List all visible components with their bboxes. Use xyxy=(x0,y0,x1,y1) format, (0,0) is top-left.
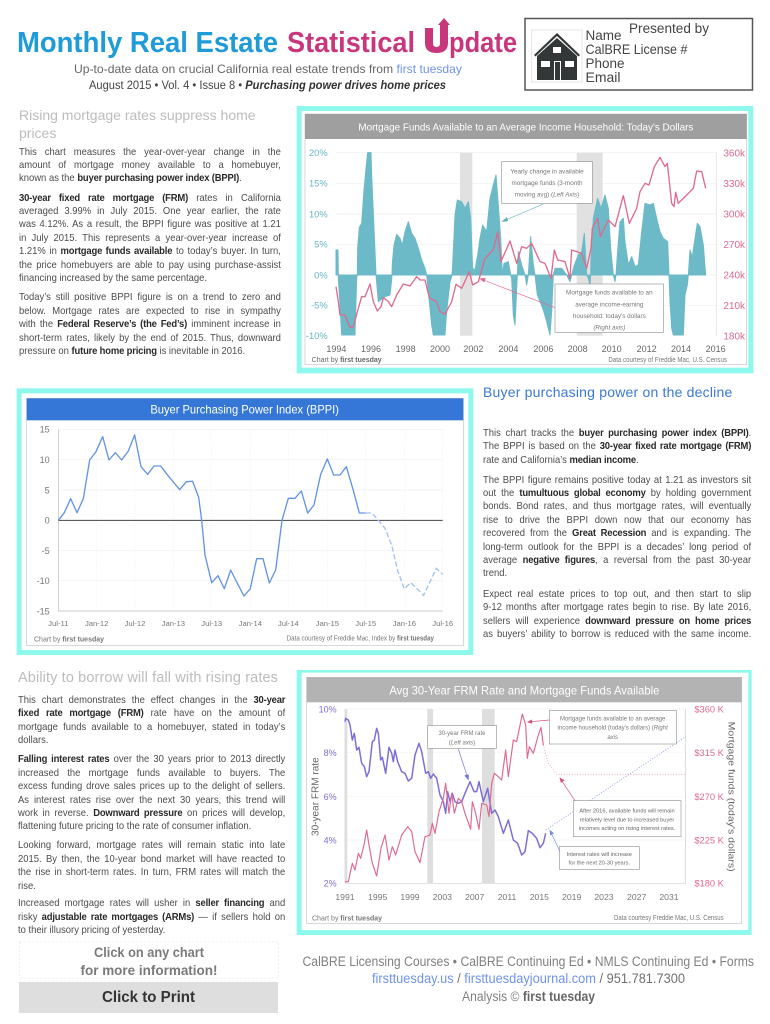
masthead title: Statistical xyxy=(287,27,415,59)
presenter box: CalBRE License # xyxy=(586,41,688,57)
button: click to print: Click to Print xyxy=(102,989,196,1006)
text block: looking forward: 2015. By then, the 10-year bond market will have reacted to xyxy=(18,853,285,865)
text block: rising rates intro: amount of mortgage money available to a homebuyer, xyxy=(19,159,281,171)
chart credits: Chart by first tuesday xyxy=(34,637,104,644)
y axis labels: 15 xyxy=(40,425,50,435)
text block: BPPI description: The BPPI is based on the 30-year fixed rate mortgage (FRM) xyxy=(483,440,751,452)
text block: BPPI outlook: rise to drive the BPPI down now that our economy has xyxy=(483,514,751,526)
callout: mortgage funds: income household (today's dollars) (Right xyxy=(558,726,668,732)
text block: falling interest rates: work in reverse. Downward pressure on prices will develop, xyxy=(18,807,285,819)
x axis labels: 2003 xyxy=(433,892,452,902)
x axis labels: Jan-15 xyxy=(316,619,339,628)
x axis labels: 2016 xyxy=(706,344,726,354)
y axis labels: 10 xyxy=(40,455,50,465)
text block: 30-year FRM: was 4.12%. As a result, the BPPI figure was positive at 1.21 xyxy=(19,218,281,230)
callout: mortgage funds: average income-earning xyxy=(575,301,644,308)
right axis labels: 360k xyxy=(723,148,746,159)
text block: price expectations: Expect real estate prices to top out, and then start to slip xyxy=(483,588,751,600)
callout: FRM rate xyxy=(428,726,497,748)
heading: rising mortgage rates xyxy=(19,107,256,141)
x axis labels: Jan-14 xyxy=(239,619,263,628)
line: mortgage funds forecast xyxy=(543,745,686,774)
chart credits xyxy=(34,636,434,644)
text block: rising rates intro: This chart measures the year-over-year change in the xyxy=(19,146,281,158)
callout: after 2016: After 2016, available funds will remain xyxy=(579,809,675,815)
x axis labels: 2031 xyxy=(659,892,679,902)
text block: positive BPPI: below. Mortgage rates are expected to rise in sympathy xyxy=(19,305,281,317)
callout: yearly change xyxy=(502,162,592,203)
left axis labels xyxy=(306,148,328,341)
x axis labels: 2004 xyxy=(498,344,518,354)
chart header: Avg 30-Year FRM Rate and Mortgage Funds Available xyxy=(389,684,659,697)
chart credits: Data courtesy Freddie Mac, U.S. Census xyxy=(614,915,724,922)
left axis labels: -10% xyxy=(306,331,328,341)
text block: 30-year FRM: financing increased by the same percentage. xyxy=(19,272,207,284)
left axis title: 30-year FRM rate xyxy=(311,757,322,836)
right axis title: Mortgage funds (today's dollars) xyxy=(726,722,736,872)
left axis labels: -5% xyxy=(311,301,328,311)
text block: 30-year FRM: 30-year fixed rate mortgage (FRM) rates in California xyxy=(19,192,281,204)
callout: mortgage funds: (Right axis) xyxy=(593,325,625,332)
x axis labels xyxy=(48,619,453,628)
x axis labels: 2010 xyxy=(602,344,622,354)
left axis labels: 4% xyxy=(324,835,337,845)
line: mortgage funds in dollars xyxy=(336,157,706,328)
masthead title xyxy=(17,18,517,59)
x axis labels: Jul-14 xyxy=(278,619,299,628)
right axis labels: $225 K xyxy=(694,835,725,845)
text block: price expectations: sellers will experience downward pressure on home prices xyxy=(483,615,751,627)
x axis labels: 1995 xyxy=(368,892,387,902)
text block: price expectations xyxy=(483,588,751,640)
callout: after 2016 xyxy=(573,801,681,837)
text block: BPPI outlook: recovered from the Great Recession and is expanding. The xyxy=(483,527,751,539)
text block: 30-year FRM: in July 2015. This represents a year-over-year increase of xyxy=(19,232,281,244)
left axis labels: 2% xyxy=(324,879,337,889)
callout: click on any chart: for more information! xyxy=(80,962,218,978)
text block: positive BPPI: with the Federal Reserve’s (the Fed’s) imminent increase in xyxy=(19,318,281,330)
x axis labels: 1991 xyxy=(335,892,355,902)
line: FRM rate forecast xyxy=(546,737,686,830)
masthead title: Monthly Real Estate xyxy=(17,27,278,59)
footer links: Analysis © first tuesday xyxy=(462,989,595,1004)
chart credits: Data courtesy of Freddie Mac, U.S. Census xyxy=(608,357,727,364)
bars: yearly change in mortgage funds xyxy=(336,153,706,335)
text block: chart demonstration: mortgage funds available to a homebuyer, stated in today’s xyxy=(18,721,285,733)
text block: rising rates intro xyxy=(19,146,281,184)
chart header xyxy=(305,114,747,139)
chart header xyxy=(27,398,463,420)
x axis labels: 2015 xyxy=(530,892,549,902)
y axis labels: -10 xyxy=(37,576,50,586)
right axis labels xyxy=(694,704,725,889)
chart credits: Data courtesy of Freddie Mac, Index by first tuesday xyxy=(287,636,434,643)
chart credits: Chart by first tuesday xyxy=(312,357,382,364)
x axis labels: 2023 xyxy=(594,892,614,902)
presenter box: Presented by xyxy=(629,20,709,36)
subtitle: Up-to-date data on crucial California real estate trends from first tuesday xyxy=(74,62,462,76)
text block: BPPI outlook: trend. xyxy=(483,567,507,579)
x axis labels: 2019 xyxy=(562,892,581,902)
text block: 30-year FRM: 1.21% in mortgage funds available to today’s buyer. In turn, xyxy=(19,245,281,257)
text block: BPPI outlook xyxy=(483,474,752,579)
line: BPPI forecast xyxy=(366,513,443,595)
callout: after 2016: incomes acting on rising interest rates. xyxy=(579,826,676,832)
y axis labels: 5 xyxy=(45,485,50,495)
x axis labels: Jul-11 xyxy=(48,619,68,628)
button: click to print xyxy=(19,982,278,1013)
text block: positive BPPI: Today’s still positive BPPI figure is on a trend to zero and xyxy=(19,291,281,303)
text block: looking forward xyxy=(18,839,285,892)
text block: falling interest rates: Falling interest rates over the 30 years prior to 2013 directly xyxy=(18,753,285,765)
heading: buyer purchasing power: Buyer purchasing power on the decline xyxy=(483,384,732,400)
heading: ability to borrow: Ability to borrow will fall with rising rates xyxy=(18,670,278,686)
right axis labels: $360 K xyxy=(694,704,725,714)
left axis labels: 10% xyxy=(319,704,337,714)
x axis labels: 2014 xyxy=(671,344,691,354)
x axis labels: 2011 xyxy=(498,892,516,902)
text block: falling interest rates: As interest rates rise over the next 30 years, this trend will xyxy=(18,794,285,806)
x axis labels: 1994 xyxy=(326,344,346,354)
chart header xyxy=(307,677,742,702)
text block: 30-year FRM: the price homebuyers are able to pay using purchase-assist xyxy=(19,259,281,271)
text block: positive BPPI xyxy=(19,291,281,357)
chart header: Mortgage Funds Available to an Average Income Household: Today's Dollars xyxy=(358,122,693,133)
chart header: Buyer Purchasing Power Index (BPPI) xyxy=(150,404,339,417)
text block: positive BPPI: short-term rates, likely by the end of 2015. Thus, downward xyxy=(19,332,281,344)
text block: falling interest rates: increased the mortgage funds available to buyers. The xyxy=(18,767,285,779)
right axis labels: 300k xyxy=(723,210,746,221)
left axis labels: 6% xyxy=(324,792,337,802)
y axis labels: -5 xyxy=(42,546,50,556)
right axis labels: 240k xyxy=(723,271,746,282)
x axis labels xyxy=(335,892,679,902)
arrow: FRM rate xyxy=(458,749,468,780)
x axis labels: Jul-13 xyxy=(201,619,222,628)
text block: falling interest rates xyxy=(18,753,286,832)
x axis labels: Jan-13 xyxy=(162,619,185,628)
left axis labels: 15% xyxy=(309,179,328,189)
subtitle xyxy=(74,62,462,92)
heading: rising mortgage rates: Rising mortgage rates suppress home xyxy=(19,107,256,123)
line: FRM rate xyxy=(345,718,546,855)
right axis labels: 210k xyxy=(723,301,746,312)
callout: mortgage funds xyxy=(555,284,663,332)
right axis labels: 330k xyxy=(723,179,746,190)
right axis labels xyxy=(717,148,746,342)
text block: BPPI outlook: bonds. Bond rates, and thus mortgage rates, will eventually xyxy=(483,500,751,512)
text block: BPPI description: This chart tracks the buyer purchasing power index (BPPI). xyxy=(483,427,751,439)
y axis labels xyxy=(37,425,50,616)
callout: mortgage funds: household: today's dollars xyxy=(573,313,646,320)
callout: FRM rate: (Left axis) xyxy=(449,740,475,746)
presenter box: Email xyxy=(586,69,620,85)
arrow: mortgage funds xyxy=(528,720,549,723)
left axis labels xyxy=(319,704,337,889)
x axis labels: Jul-12 xyxy=(125,619,145,628)
left axis labels: 0% xyxy=(314,270,328,280)
text block: chart demonstration xyxy=(18,694,286,746)
left axis labels: 5% xyxy=(314,240,328,250)
footer links: firsttuesday.us / firsttuesdayjournal.com / 951.781.7300 xyxy=(372,971,685,986)
text block: looking forward: the rise in short-term rates. In turn, FRM rates will match the xyxy=(18,866,285,878)
x axis labels: 2008 xyxy=(568,344,588,354)
x axis labels xyxy=(326,344,726,354)
x axis labels: 2012 xyxy=(637,344,657,354)
text block: BPPI outlook: average negative figures, a reversal from the past 30-year xyxy=(483,554,751,566)
left axis labels: 10% xyxy=(309,209,328,219)
text block: seller financing: Increased mortgage rates will usher in seller financing and xyxy=(18,897,285,909)
text block: BPPI description: rate and California’s median income. xyxy=(483,454,639,466)
line: mortgage funds xyxy=(345,714,543,882)
text block: BPPI outlook: long-term outlook for the BPPI is a decades’ long period of xyxy=(483,541,751,553)
recession bands xyxy=(345,709,495,883)
callout: yearly change: mortgage funds (3-month xyxy=(511,180,583,187)
text block: seller financing: to their illusory pricing of yesterday. xyxy=(18,924,165,936)
arrow: to line xyxy=(480,278,555,308)
right axis labels: $270 K xyxy=(694,792,725,802)
x axis labels: 2000 xyxy=(430,344,450,354)
chart panel: FRM rate and mortgage funds xyxy=(296,670,752,935)
right axis labels: $180 K xyxy=(694,879,725,889)
text block: chart demonstration: fixed rate mortgage (FRM) rate have on the amount of xyxy=(18,707,285,719)
icon: house xyxy=(532,30,582,82)
callout: interest rates: for the next 20-30 years. xyxy=(569,861,630,867)
x axis labels: 2002 xyxy=(463,344,483,354)
arrow: to bars xyxy=(502,204,543,221)
x axis labels: 2007 xyxy=(465,892,484,902)
masthead title: pdate xyxy=(449,27,517,59)
x axis labels: 1998 xyxy=(396,344,416,354)
text block: seller financing xyxy=(18,897,285,936)
text block: falling interest rates: excess funding drove sales prices up to the delight of sellers. xyxy=(18,780,285,792)
x axis labels: 1999 xyxy=(400,892,420,902)
text block: chart demonstration: dollars. xyxy=(18,734,48,746)
callout: after 2016: relatively level due to increased buyer xyxy=(580,817,674,823)
callout: mortgage funds: axis xyxy=(607,735,618,741)
text block: price expectations: as buyers’ ability to borrow is reduced with the same income. xyxy=(483,628,751,640)
left axis labels: 8% xyxy=(324,748,337,758)
x axis labels: 1996 xyxy=(361,344,381,354)
text block: 30-year FRM: averaged 3.99% in July 2015. One year earlier, the rate xyxy=(19,205,281,217)
left axis labels: 20% xyxy=(309,148,328,158)
callout: click on any chart: Click on any chart xyxy=(94,944,204,960)
chart credits: Chart by first tuesday xyxy=(312,916,382,923)
text block: looking forward: Looking forward, mortgage rates will remain static into late xyxy=(18,839,285,851)
x axis labels: 2006 xyxy=(533,344,553,354)
text block: BPPI outlook: out the tumultuous global economy by holding government xyxy=(483,487,751,499)
callout: mortgage funds xyxy=(549,710,676,744)
x axis labels: 2027 xyxy=(627,892,646,902)
chart panel: mortgage funds available xyxy=(296,106,754,374)
x axis labels: Jan-12 xyxy=(85,619,108,628)
right axis labels: 180k xyxy=(723,331,746,342)
chart panel: buyer purchasing power index xyxy=(16,388,474,655)
callout: yearly change: moving avg) (Left Axis) xyxy=(515,192,579,199)
y axis labels: -15 xyxy=(37,606,50,616)
heading: rising mortgage rates: prices xyxy=(19,125,56,141)
chart credits xyxy=(312,915,724,923)
callout: mortgage funds: Mortgage funds available to an xyxy=(566,290,653,297)
text block: 30-year FRM xyxy=(19,192,281,284)
footer links xyxy=(302,954,754,1004)
x axis labels: Jul-16 xyxy=(432,619,453,628)
callout: interest rates xyxy=(559,847,639,869)
right axis labels: 270k xyxy=(723,240,746,251)
callout: mortgage funds: Mortgage funds available to an average xyxy=(560,717,666,723)
text block: rising rates intro: known as the buyer purchasing power index (BPPI). xyxy=(19,172,242,184)
text block: BPPI outlook: The BPPI figure remains positive today at 1.21 as investors sit xyxy=(483,474,751,486)
subtitle: August 2015 • Vol. 4 • Issue 8 • Purchasing power drives home prices xyxy=(89,80,446,92)
text block: chart demonstration: This chart demonstrates the effect changes in the 30-year xyxy=(18,694,285,706)
arrow: after 2016 xyxy=(560,778,575,801)
x axis labels: Jan-16 xyxy=(393,619,416,628)
arrow: interest rates xyxy=(550,830,560,852)
text block: falling interest rates: flattening future pricing to the rate of consumer inflation. xyxy=(18,820,251,832)
recession bands xyxy=(460,153,603,336)
presenter box: Name xyxy=(586,27,622,43)
x axis labels: Jul-15 xyxy=(355,619,376,628)
chart credits xyxy=(312,357,727,364)
callout: FRM rate: 30-year FRM rate xyxy=(438,731,486,737)
y axis labels: 0 xyxy=(45,516,50,526)
right axis labels: $315 K xyxy=(694,748,725,758)
text block: looking forward: rise. xyxy=(18,880,36,892)
line: BPPI actual xyxy=(58,435,366,596)
callout: click on any chart xyxy=(19,942,279,978)
callout: yearly change: Yearly change in available xyxy=(510,168,584,175)
presenter box xyxy=(524,18,754,91)
presenter box: Phone xyxy=(586,55,625,71)
text block: BPPI description xyxy=(483,427,751,466)
text block: seller financing: risky adjustable rate mortgages (ARMs) — if sellers hold on xyxy=(18,911,285,923)
text block: price expectations: 9-12 months after mortgage rates begin to rise. By late 2016, xyxy=(483,601,751,613)
text block: positive BPPI: pressure on future home pricing is inevitable in 2016. xyxy=(19,345,245,357)
callout: interest rates: Interest rates will increase xyxy=(567,852,632,858)
